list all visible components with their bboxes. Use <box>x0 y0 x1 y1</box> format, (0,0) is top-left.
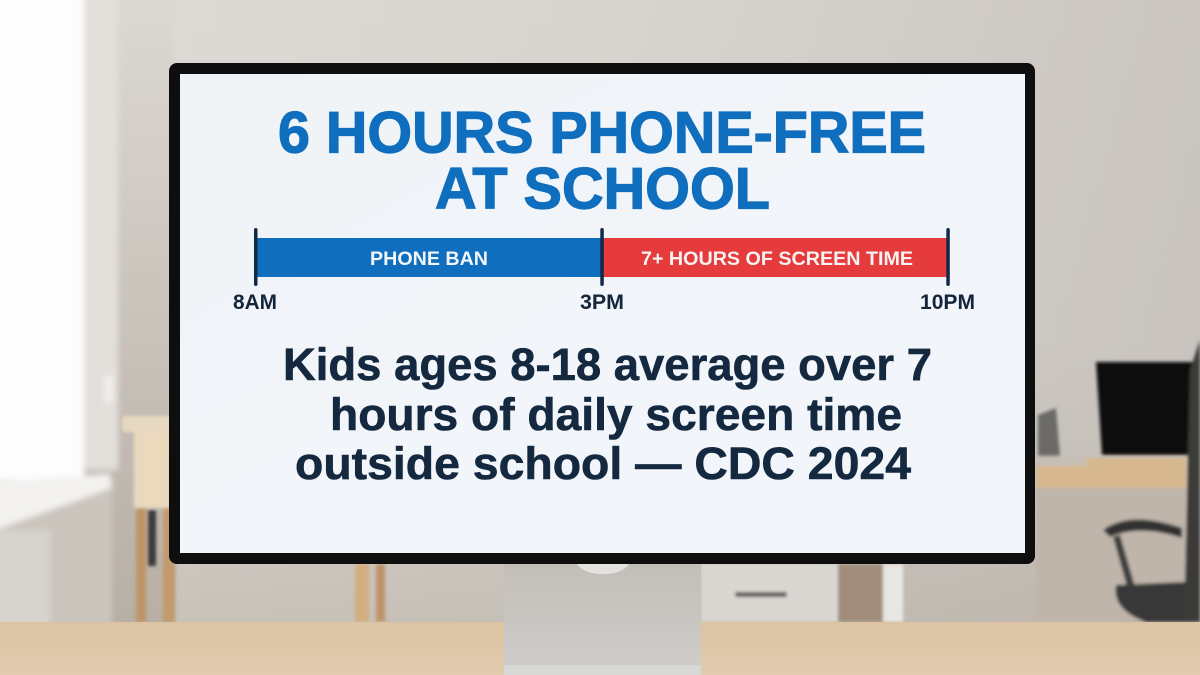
body statement <box>283 339 932 489</box>
right desk with laptop and chair <box>1036 340 1200 622</box>
body statement: outside school — CDC 2024 <box>295 438 911 489</box>
left side table <box>122 416 385 622</box>
time labels: 3PM <box>580 291 624 314</box>
phone ban segment: PHONE BAN <box>370 248 488 270</box>
time labels: 10PM <box>920 291 975 314</box>
left window and curtain <box>0 0 174 630</box>
screen time segment <box>602 238 947 277</box>
screen time segment: 7+ HOURS OF SCREEN TIME <box>641 248 913 270</box>
timeline <box>233 228 975 314</box>
phone ban segment <box>256 238 602 277</box>
time labels <box>233 291 975 314</box>
monitor stand <box>504 564 701 675</box>
monitor <box>169 63 1035 564</box>
stand base highlight <box>504 665 701 675</box>
time labels: 8AM <box>233 291 277 314</box>
title: 6 HOURS PHONE-FREE <box>278 100 926 166</box>
monitor bezel <box>169 63 1035 564</box>
timeline ticks <box>254 228 950 286</box>
desk surface <box>0 622 1200 675</box>
body statement: Kids ages 8-18 average over 7 <box>283 339 932 390</box>
monitor screen <box>180 74 1025 553</box>
title <box>278 100 926 222</box>
body statement: hours of daily screen time <box>330 389 902 440</box>
right wall area with drawer <box>701 564 903 622</box>
title: AT SCHOOL <box>435 156 770 222</box>
stand hinge <box>577 564 629 574</box>
